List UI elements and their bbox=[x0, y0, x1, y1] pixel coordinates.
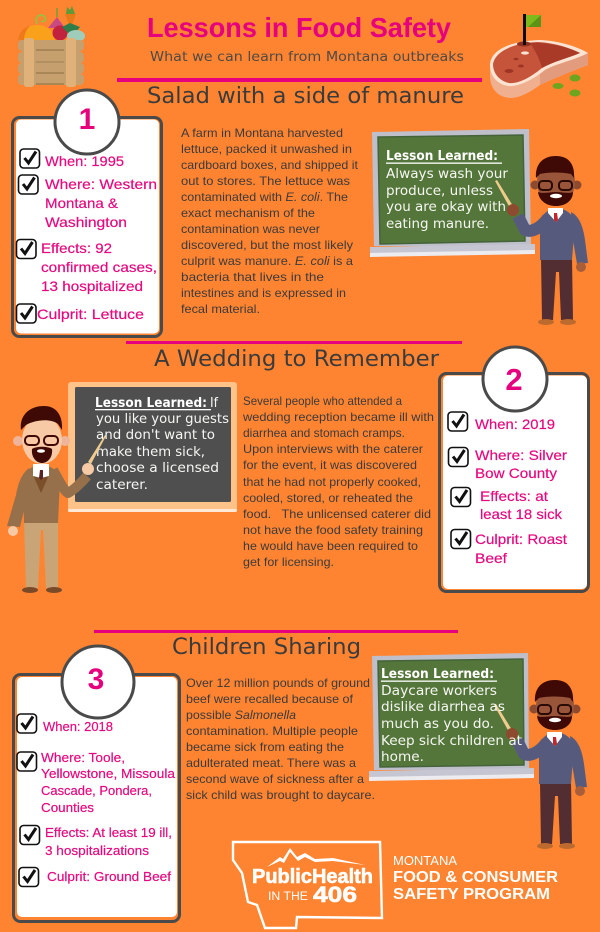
logo: Public Health in the 406: PublicHealth bbox=[252, 866, 373, 888]
subtitle: What we can learn from Montana outbreaks bbox=[150, 49, 464, 65]
item: culprit: Beef bbox=[475, 550, 507, 566]
chalkboard: lesson 2: you like your guests bbox=[96, 411, 229, 427]
divider: section 3 bbox=[94, 630, 458, 633]
text block: outbreak 1 story: intestines and is expressed in bbox=[181, 286, 346, 300]
item: where: Bow County bbox=[475, 465, 557, 481]
item: when bbox=[17, 714, 113, 734]
item: where: Montana & bbox=[45, 195, 119, 211]
text block: outbreak 3 story: second wave of sickness after a bbox=[186, 772, 364, 786]
title: Lessons in Food Safety bbox=[147, 12, 451, 43]
item: effects: 13 hospitalized bbox=[41, 278, 143, 294]
chalkboard: lesson 1 bbox=[370, 129, 535, 257]
text block: outbreak 1 story: lettuce, packed it unwashed in bbox=[181, 142, 352, 156]
text block: outbreak 2 story: get for licensing. bbox=[243, 555, 334, 569]
item: culprit: Culprit: Lettuce bbox=[37, 306, 144, 322]
item: culprit: Culprit: Ground Beef bbox=[47, 869, 171, 884]
item: when: When: 2019 bbox=[475, 416, 555, 432]
text block: outbreak 1 story bbox=[181, 126, 359, 316]
item: where bbox=[17, 750, 176, 815]
badge: number 1: 1 bbox=[79, 103, 95, 136]
text block: outbreak 1 story: bacteria that lives in the bbox=[181, 270, 324, 284]
chalkboard: lesson 1: produce, unless bbox=[386, 183, 493, 199]
logo: Public Health in the 406: IN THE bbox=[268, 889, 308, 903]
item: culprit: Culprit: Roast bbox=[475, 531, 567, 547]
text block: outbreak 2 story: for the event, it was discovered bbox=[243, 458, 417, 472]
chalkboard: lesson 1: you are okay with bbox=[386, 199, 506, 215]
item: where: Washington bbox=[45, 214, 127, 230]
item: where: Yellowstone, Missoula bbox=[41, 766, 176, 781]
chalkboard: lesson 2: make them sick, bbox=[96, 444, 205, 460]
logo: Public Health in the 406 bbox=[233, 842, 382, 928]
text block: lesson 3 chalk writing: Daycare workers bbox=[381, 683, 497, 699]
heading: section 2: A Wedding to Remember bbox=[154, 347, 440, 372]
icon: steak with flag bbox=[490, 14, 588, 98]
text block: lesson 3 chalk writing bbox=[381, 666, 522, 765]
item: where: Where: Toole, bbox=[41, 750, 125, 765]
item: where: Where: Western bbox=[45, 176, 157, 192]
badge: number 2 bbox=[483, 347, 547, 411]
item: where: Counties bbox=[41, 800, 95, 815]
badge: number 3: 3 bbox=[88, 663, 104, 696]
item: effects bbox=[20, 825, 172, 858]
item: when: When: 2018 bbox=[43, 719, 113, 734]
text block: outbreak 1 story: exact mechanism of the bbox=[181, 206, 315, 220]
text block: outbreak 3 story: sick child was brought to daycare. bbox=[186, 788, 375, 802]
logo text: program name: MONTANA bbox=[393, 854, 458, 868]
text block: lesson 3 chalk writing: Keep sick children at bbox=[381, 733, 522, 749]
text block: outbreak 2 story: wedding reception became ill with bbox=[242, 410, 434, 424]
logo text: program name: SAFETY PROGRAM bbox=[393, 886, 550, 903]
chalkboard: lesson 2: and don't want to bbox=[96, 427, 215, 443]
text block: lesson 3 chalk writing: dislike diarrhea as bbox=[381, 699, 505, 715]
text block: outbreak 3 story: beef were recalled because of bbox=[186, 692, 354, 706]
chalkboard: lesson 2: caterer. bbox=[96, 477, 148, 493]
heading: section 1: Salad with a side of manure bbox=[147, 84, 464, 109]
text block: outbreak 3 story bbox=[186, 676, 375, 802]
item: when bbox=[20, 149, 124, 169]
panel: outbreak 1 facts bbox=[12, 90, 162, 336]
item: effects: Effects: 92 bbox=[41, 240, 112, 256]
figure: teacher 2 bbox=[7, 406, 106, 593]
divider: section 1 bbox=[117, 78, 482, 82]
item: where: Where: Silver bbox=[475, 447, 567, 463]
text block: outbreak 1 story: discovered, but the most likely bbox=[181, 238, 353, 252]
badge: number 2: 2 bbox=[505, 362, 523, 397]
text block: lesson 3 chalk writing: home. bbox=[381, 749, 424, 765]
item: culprit bbox=[19, 868, 171, 886]
text block: outbreak 1 story: contaminated with E. coli. The bbox=[181, 190, 348, 204]
item: where: Cascade, Pondera, bbox=[41, 783, 152, 798]
item: effects: confirmed cases, bbox=[41, 259, 157, 275]
text block: outbreak 2 story: diarrhea and stomach cramps. bbox=[243, 426, 405, 440]
text block: lesson 3 chalk writing: much as you do. bbox=[381, 716, 494, 732]
text block: outbreak 1 story: out to stores. The lettuce was bbox=[181, 174, 350, 188]
text block: outbreak 2 story: Several people who attended a bbox=[243, 394, 402, 408]
chalkboard: lesson 1: Always wash your bbox=[386, 166, 508, 182]
text block: outbreak 1 story: A farm in Montana harvested bbox=[181, 126, 343, 140]
figure: teacher 1 bbox=[495, 156, 588, 325]
text block: outbreak 3 story: contamination. Multiple people bbox=[186, 724, 358, 738]
chalkboard: lesson 2: Lesson Learned: bbox=[95, 395, 207, 411]
heading: section 3: Children Sharing bbox=[172, 635, 361, 660]
text block: lesson 3 chalk writing: Lesson Learned: bbox=[381, 666, 494, 682]
text block: outbreak 2 story: food. The unlicensed caterer did bbox=[243, 507, 431, 521]
item: effects: 3 hospitalizations bbox=[45, 843, 150, 858]
chalkboard: lesson 3 bbox=[369, 653, 534, 781]
item: culprit bbox=[16, 304, 144, 323]
item: effects bbox=[16, 240, 157, 294]
text block: outbreak 3 story: adulterated meat. There was a bbox=[186, 756, 356, 770]
text block: outbreak 3 story: possible Salmonella bbox=[186, 708, 296, 722]
item: culprit bbox=[451, 530, 567, 566]
text block: outbreak 2 story: cooled, stored, or reheated the bbox=[243, 491, 413, 505]
text block: outbreak 1 story: fecal material. bbox=[181, 302, 260, 316]
text block: outbreak 3 story: became sick from eating the bbox=[186, 740, 344, 754]
chalkboard: lesson 2 bbox=[68, 382, 237, 512]
text block: outbreak 3 story: Over 12 million pounds of ground bbox=[186, 676, 370, 690]
item: effects bbox=[451, 488, 563, 522]
text block: outbreak 2 story: not have the food safety training bbox=[243, 523, 423, 537]
text block: outbreak 2 story bbox=[242, 394, 434, 569]
text block: outbreak 2 story: he would have been required to bbox=[243, 539, 418, 553]
item: when: When: 1995 bbox=[45, 153, 124, 169]
chalkboard: lesson 2: choose a licensed bbox=[96, 460, 219, 476]
chalkboard: lesson 2: If bbox=[210, 395, 219, 411]
figure: teacher 3 bbox=[494, 680, 587, 849]
badge: number 3 bbox=[62, 646, 134, 718]
chalkboard: lesson 1: Lesson Learned: bbox=[386, 148, 498, 164]
text block: outbreak 2 story: that he had not properly cooked, bbox=[243, 475, 421, 489]
panel: outbreak 2 facts bbox=[440, 347, 588, 592]
logo text: program name bbox=[393, 854, 558, 903]
text block: outbreak 2 story: Upon interviews with the caterer bbox=[243, 442, 423, 456]
text block: outbreak 1 story: contamination was never bbox=[181, 222, 320, 236]
text block: outbreak 1 story: culprit was manure. E. coli is a bbox=[181, 254, 353, 268]
item: where bbox=[18, 175, 157, 230]
divider: section 2 bbox=[126, 341, 462, 344]
text block: outbreak 1 story: cardboard boxes, and shipped it bbox=[181, 158, 359, 172]
item: effects: least 18 sick bbox=[480, 506, 563, 522]
item: effects: Effects: at bbox=[480, 488, 548, 504]
badge: number 1 bbox=[55, 90, 119, 154]
chalkboard: lesson 1: eating manure. bbox=[386, 216, 489, 232]
logo: Public Health in the 406: 406 bbox=[313, 882, 357, 907]
icon: vegetable crate bbox=[18, 6, 85, 87]
item: when bbox=[448, 412, 555, 432]
item: effects: Effects: At least 19 ill, bbox=[45, 825, 172, 840]
panel: outbreak 3 facts bbox=[14, 646, 180, 922]
item: where bbox=[448, 447, 567, 481]
logo text: program name: FOOD & CONSUMER bbox=[393, 869, 558, 886]
